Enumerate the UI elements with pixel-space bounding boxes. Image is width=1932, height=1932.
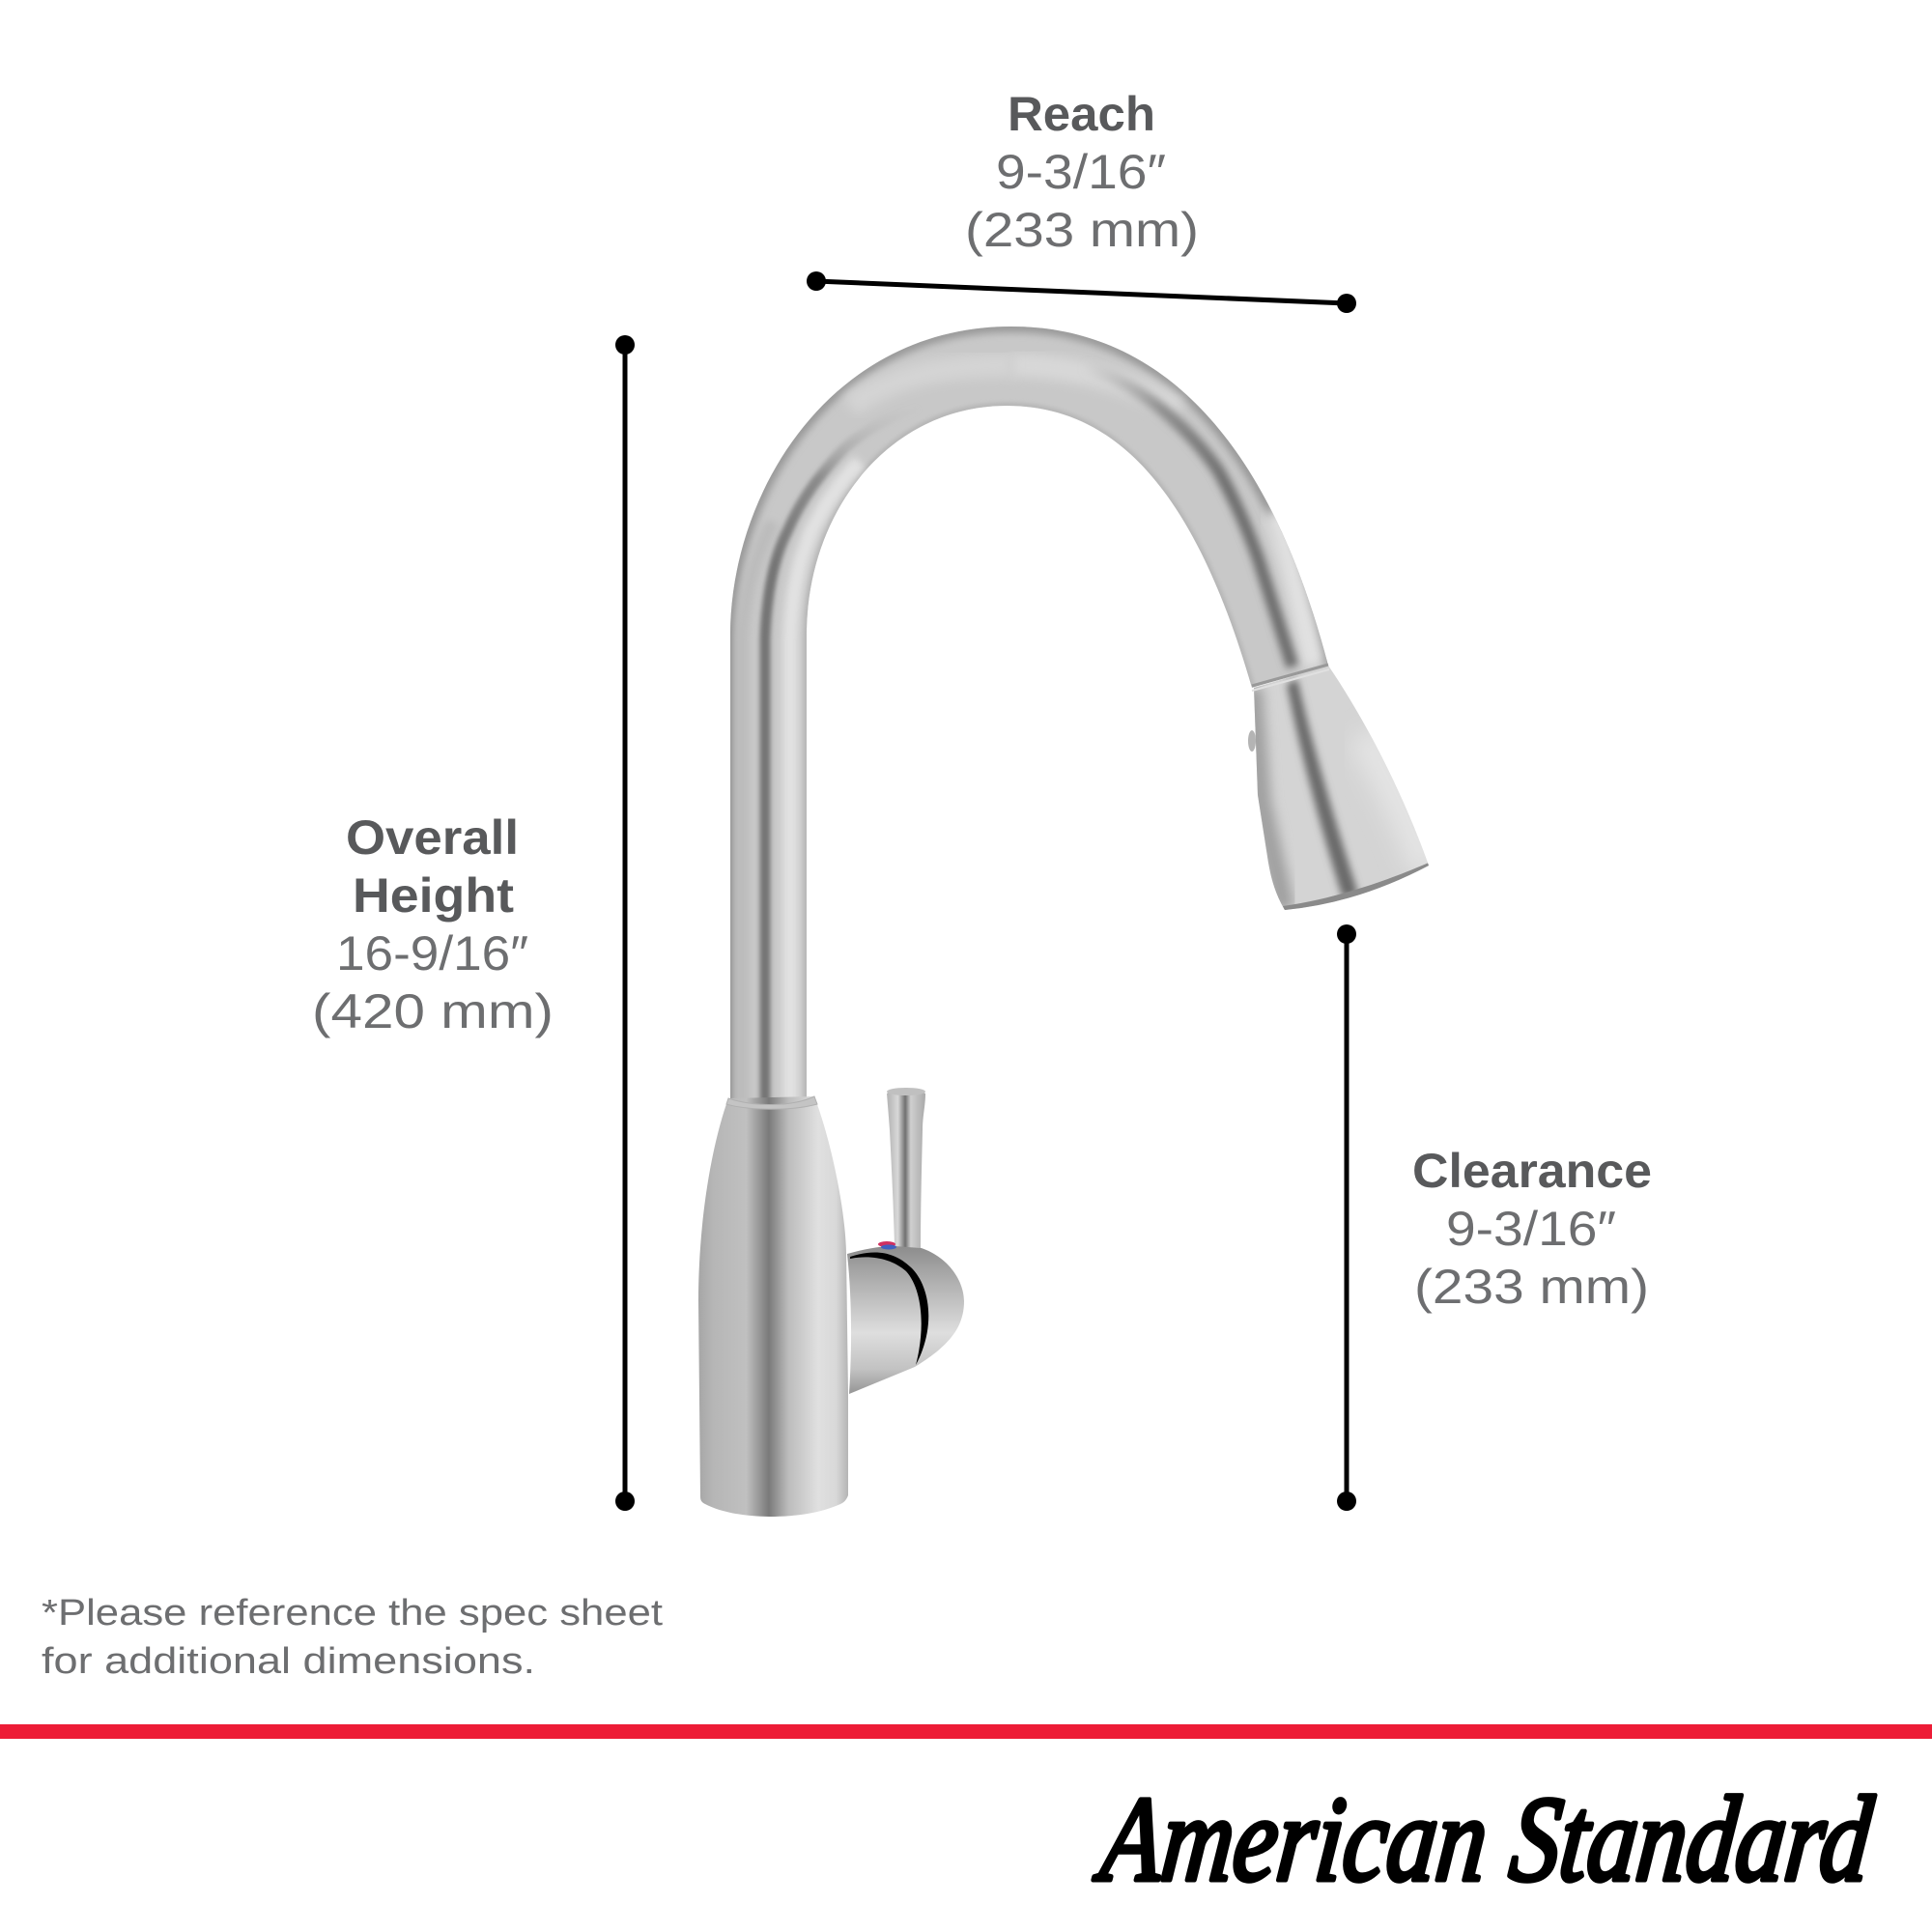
- heading: clearance dimension: [1412, 1144, 1652, 1314]
- footnote: [42, 1593, 664, 1682]
- heading: reach dimension: (233 mm): [965, 203, 1199, 257]
- footnote: *Please reference the spec sheet: [42, 1593, 664, 1634]
- heading: clearance dimension: Clearance: [1412, 1144, 1652, 1198]
- heading: reach dimension: 9-3/16″: [996, 145, 1166, 199]
- heading: overall height dimension: Height: [353, 868, 514, 923]
- heading: reach dimension: [965, 87, 1199, 257]
- heading: overall height dimension: 16-9/16″: [336, 926, 528, 980]
- faucet handle: [847, 1245, 964, 1394]
- dimension line: overall height: [615, 335, 635, 1511]
- heading: overall height dimension: [312, 810, 554, 1038]
- hot and cold indicator: [878, 1241, 896, 1250]
- heading: clearance dimension: (233 mm): [1414, 1260, 1649, 1314]
- red divider bar: [0, 1724, 1932, 1739]
- dimension line: reach: [807, 271, 1356, 313]
- faucet illustration: [698, 309, 1439, 1517]
- faucet lever: [887, 1088, 925, 1248]
- faucet base body: [698, 1096, 848, 1517]
- faucet spray head: [1248, 663, 1429, 910]
- heading: overall height dimension: (420 mm): [312, 984, 554, 1038]
- faucet spout tube: [730, 327, 1327, 1098]
- heading: reach dimension: Reach: [1008, 87, 1155, 141]
- heading: clearance dimension: 9-3/16″: [1446, 1202, 1616, 1256]
- dimension line: clearance: [1337, 924, 1356, 1511]
- heading: overall height dimension: Overall: [346, 810, 519, 865]
- footnote: for additional dimensions.: [42, 1641, 535, 1682]
